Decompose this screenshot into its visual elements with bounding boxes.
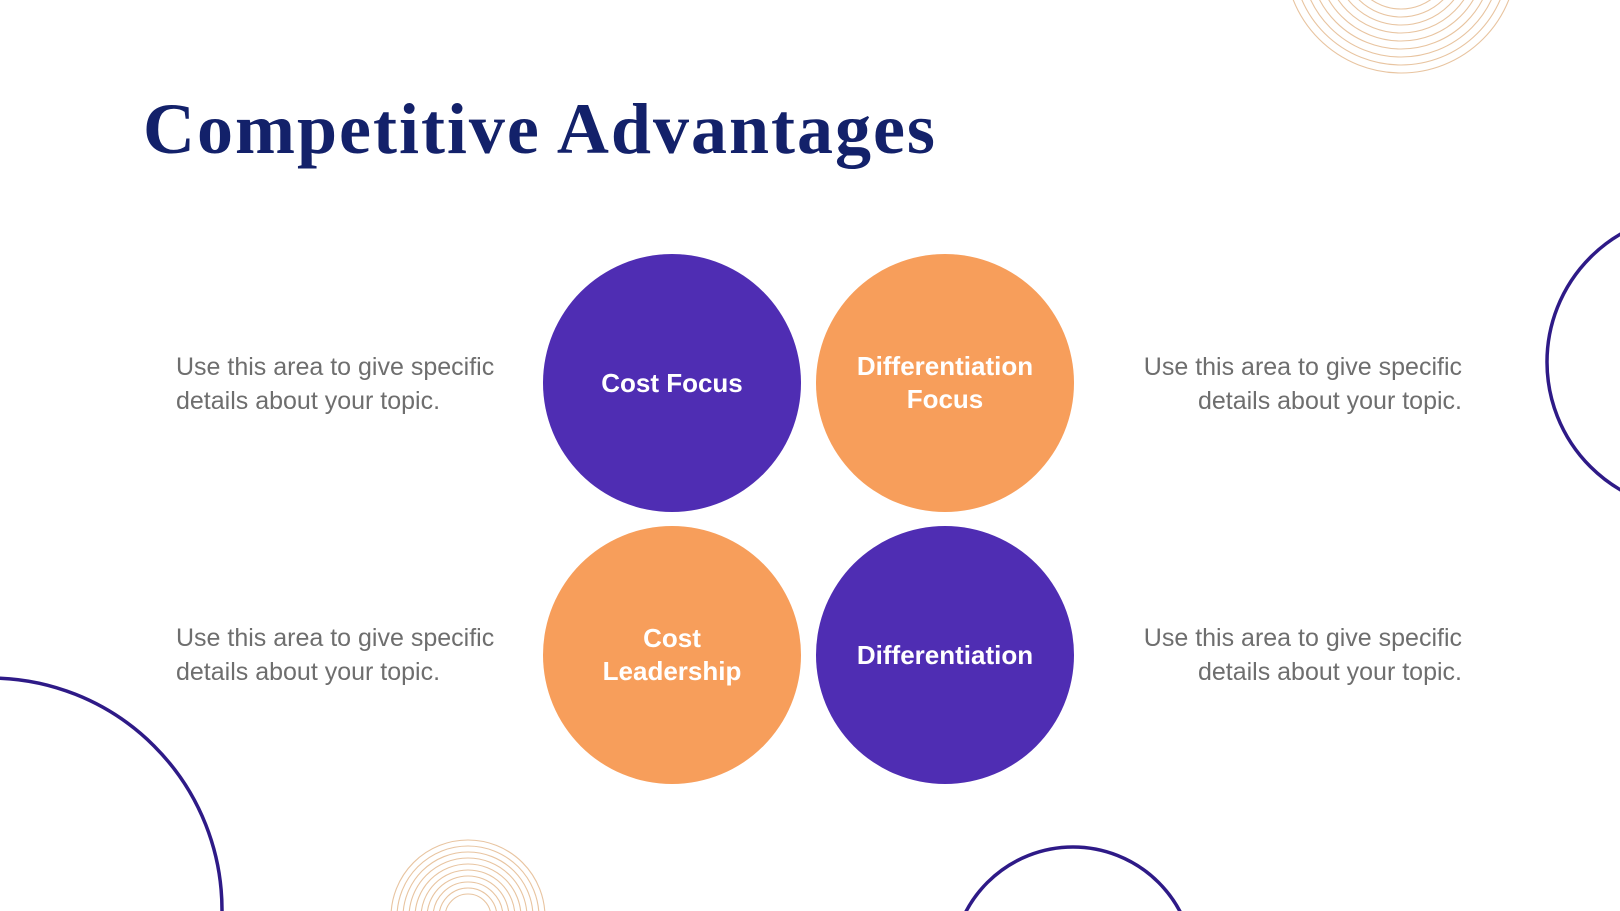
circle: Cost Leadership: Cost [643,623,701,653]
circle: Differentiation Focus [816,254,1074,512]
text: top-left description: Use this area to give specific details about your topic. [176,353,494,415]
text: bottom-right description: Use this area to give specific details about your topic. [1144,624,1462,686]
decorative outline circles [0,214,1620,911]
text: top-right description: Use this area to give specific details about your topic. [1144,353,1462,415]
circle: Differentiation: Differentiation [857,640,1033,670]
circle: Differentiation Focus: Differentiation [857,351,1033,381]
circle: Differentiation Focus: Focus [907,384,983,414]
text: bottom-left description: Use this area to give specific details about your topic. [176,624,494,686]
circle: Cost Leadership: Leadership [603,656,741,686]
circle: Cost Focus [543,254,801,512]
icon: top-right concentric rings [1285,0,1517,73]
title: Competitive Advantages [143,89,937,169]
circle: Cost Focus: Cost Focus [601,368,743,398]
circle: Cost Leadership [543,526,801,784]
icon: bottom concentric rings [391,840,545,911]
circle: Differentiation [816,526,1074,784]
